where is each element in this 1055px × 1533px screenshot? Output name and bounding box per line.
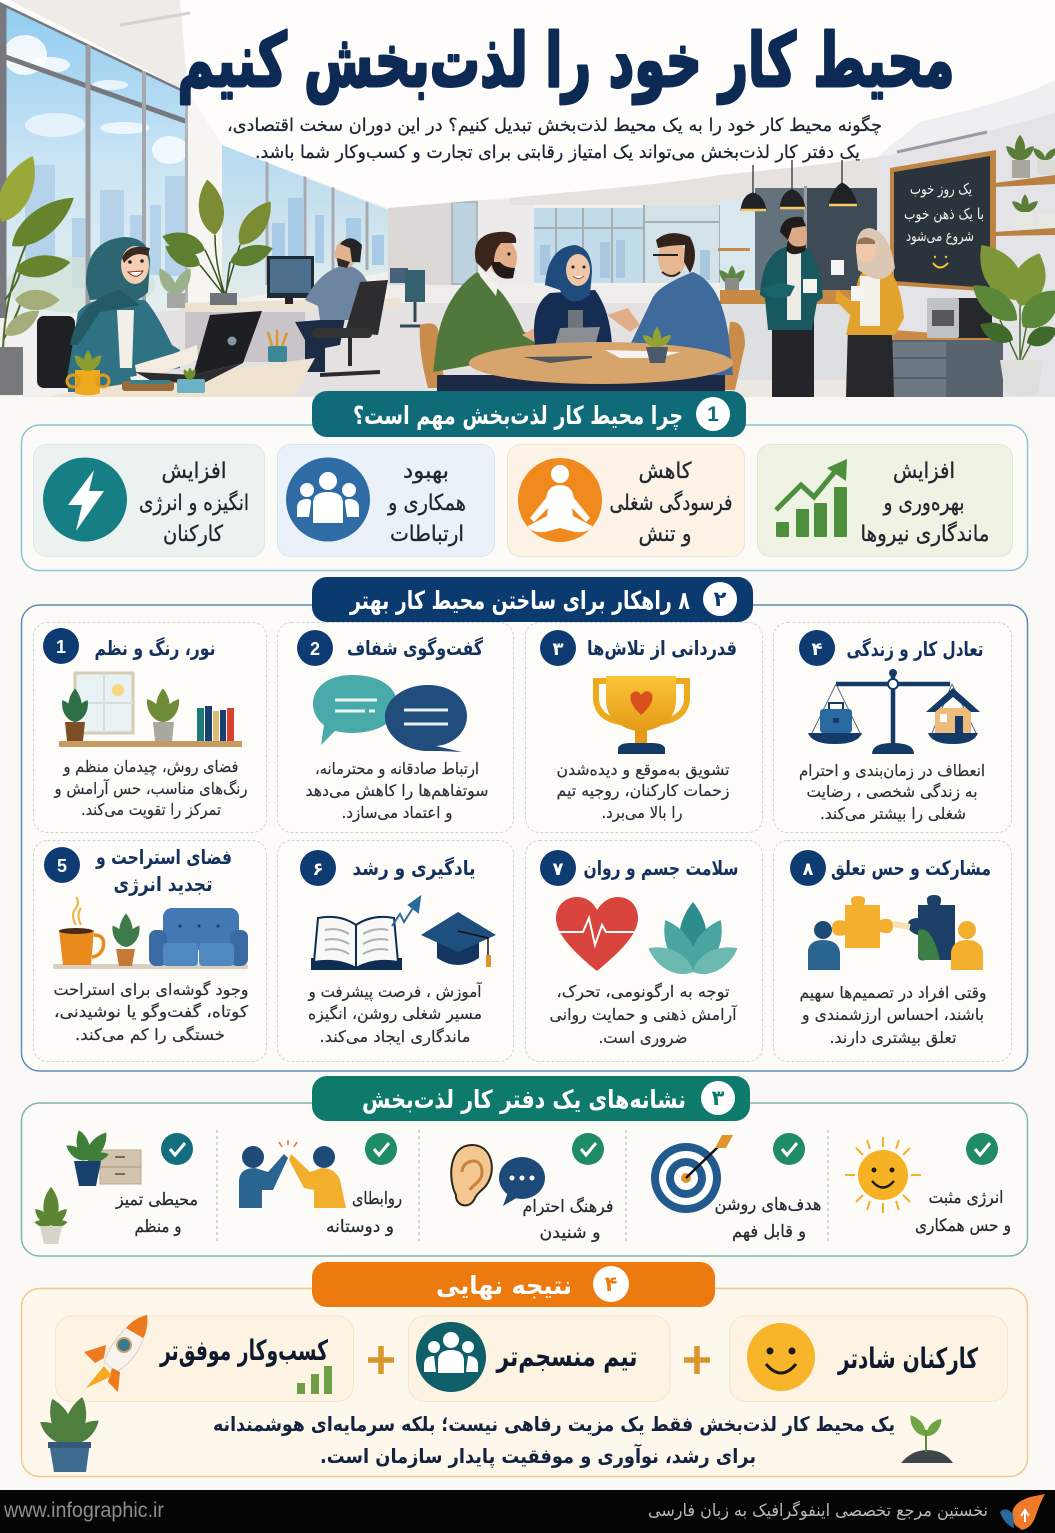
sign: clear goals: و قابل فهم (732, 1222, 806, 1242)
card 2: open conversation: ارتباط صادقانه و محترمانه، (315, 759, 479, 779)
white curved ceiling (0, 0, 1055, 208)
second window band (222, 145, 388, 302)
back desk and monitor (180, 256, 430, 362)
card 8: participation: مشارکت و حس تعلق (831, 856, 991, 880)
card 5: rest corner: تجدید انرژی (114, 872, 212, 896)
pendant lamps (741, 160, 857, 210)
card 1: light colour order: تمرکز را تقویت می‌کند. (81, 800, 221, 820)
card 5: rest corner: 5 (57, 856, 67, 876)
card 7: mental and physical health: سلامت جسم و روان (584, 856, 738, 880)
plant on shelf (716, 248, 750, 290)
panel: eight solutions (22, 605, 1028, 1071)
icon: balance scale (808, 669, 980, 754)
card 4: work life balance (774, 622, 1012, 832)
panel: signs of a pleasant office (22, 1103, 1028, 1256)
icon: sprout (901, 1412, 953, 1463)
back window right and dark cabinet (720, 186, 877, 397)
card 4: work life balance: شغلی را بیشتر می‌کند. (820, 804, 966, 824)
heading pill 1: 1 (707, 403, 719, 426)
desk with laptop (43, 311, 315, 397)
woman in navy (534, 245, 612, 345)
track light (897, 132, 987, 152)
icon: ear (451, 1145, 492, 1205)
closing statement (213, 1412, 895, 1469)
intro text (227, 114, 882, 163)
icon: target (651, 1135, 733, 1213)
icon: potted plant (36, 1395, 103, 1472)
footer bar (0, 1490, 1055, 1533)
icon: graduation cap (421, 912, 496, 967)
ceiling beige band (510, 157, 877, 205)
card 1: light colour order: 1 (56, 637, 66, 657)
chalkboard with quote: یک روز خوب (910, 180, 972, 198)
footer bar: www.infographic.ir (3, 1499, 164, 1522)
heading pill 2 (312, 577, 753, 622)
card 7: mental and physical health: ۷ (552, 859, 564, 879)
card 2: open conversation: گفت‌وگوی شفاف (347, 636, 483, 660)
section 2 (22, 577, 1028, 1071)
icon: lotus (644, 902, 742, 981)
card: productivity (758, 444, 1012, 556)
chalkboard with quote: با یک ذهن خوب (904, 205, 984, 223)
card: burnout: کاهش (638, 459, 692, 484)
heading pill 1 (312, 391, 746, 437)
card 3: appreciation: را بالا می‌برد. (602, 803, 682, 823)
sign: tidy environment: محیطی تمیز (115, 1190, 198, 1210)
card: motivation: کارکنان (163, 522, 223, 547)
result: more successful business: کسب‌وکار موفق‌تر (159, 1334, 328, 1367)
icon: logo (1000, 1494, 1045, 1530)
sign: tidy environment (32, 1129, 198, 1244)
left window wall (0, 0, 188, 318)
heading pill 2: ۸ راهکار برای ساختن محیط کار بهتر (348, 586, 690, 616)
card 5: rest corner: خستگی را کم می‌کند. (75, 1025, 225, 1045)
card: burnout: فرسودگی شغلی (610, 490, 732, 516)
icon: puzzle and people (808, 895, 983, 970)
icon: mug plant sofa (53, 897, 248, 969)
plant: middle (159, 180, 272, 308)
sign: positive energy (845, 1133, 1011, 1236)
top left soffit (10, 0, 188, 92)
card 4: work life balance: تعادل کار و زندگی (846, 637, 984, 661)
section 4 (22, 1262, 1028, 1476)
card 6: learning: ۶ (312, 859, 324, 879)
card 1: light colour order: نور، رنگ و نظم (94, 636, 216, 660)
heading pill 4: ۴ (605, 1273, 618, 1296)
card: teamwork: همکاری و (387, 491, 466, 516)
standing woman with cup (831, 228, 904, 397)
wall shelves with plants (995, 135, 1055, 236)
card 4: work life balance: به زندگی شخصی ، رضایت (806, 782, 978, 802)
card 6: learning (278, 840, 514, 1062)
back worker (295, 238, 388, 375)
card 3: appreciation: قدردانی از تلاش‌ها (587, 636, 737, 660)
card: motivation: افزایش (162, 459, 226, 484)
card 3: appreciation: ۳ (552, 639, 564, 659)
icon: lightning bolt (43, 458, 127, 542)
card: teamwork: ارتباطات (390, 522, 464, 547)
card 6: learning: یادگیری و رشد (352, 856, 476, 880)
icon: high five (239, 1140, 346, 1208)
sign: friendly relations (239, 1133, 402, 1237)
heading pill 4 (312, 1262, 715, 1307)
icon: meditation (518, 458, 602, 542)
result: cohesive team (408, 1316, 670, 1402)
sign: positive energy: انرژی مثبت (928, 1188, 1004, 1208)
card 5: rest corner: وجود گوشه‌ای برای استراحت (54, 980, 248, 1000)
card 7: mental and physical health (526, 840, 762, 1062)
card 5: rest corner: کوتاه، گفت‌وگو یا نوشیدنی، (54, 1002, 248, 1022)
panel: why it matters (22, 425, 1028, 570)
counter with coffee machine and drawers (890, 298, 1003, 397)
sign: listening culture: فرهنگ احترام (522, 1196, 614, 1217)
card 2: open conversation: سوتفاهم‌ها را کاهش می‌دهد (306, 781, 488, 801)
icon: small potted plant (32, 1187, 70, 1244)
card 5: rest corner (34, 840, 266, 1062)
sign: friendly relations: و دوستانه (326, 1217, 394, 1237)
result: happier staff: کارکنان شادتر (837, 1342, 979, 1375)
card: burnout: و تنش (638, 522, 692, 547)
card: teamwork: بهبود (403, 459, 449, 484)
card 6: learning: ماندگاری ایجاد می‌کند. (320, 1027, 470, 1047)
icon: growth arrow (392, 897, 420, 926)
card 3: appreciation: تشویق به‌موقع و دیده‌شدن (556, 760, 730, 780)
chairs (420, 322, 745, 390)
card 4: work life balance: انعطاف در زمان‌بندی و احترام (799, 761, 985, 781)
card 8: participation: تعلق بیشتری دارند. (830, 1028, 956, 1048)
floor (154, 303, 727, 397)
meeting group at round table (420, 232, 745, 397)
section 1 (22, 391, 1028, 570)
icon: speech bubbles (313, 675, 467, 752)
icon: people (286, 458, 370, 542)
card 2: open conversation: و اعتماد می‌سازد. (342, 803, 452, 823)
card 8: participation: وقتی افراد در تصمیم‌ها سهیم (800, 983, 986, 1003)
sign: friendly relations: روابطای (352, 1189, 402, 1209)
card 1: light colour order: رنگ‌های مناسب، حس آرامش و (54, 779, 247, 799)
chalkboard with quote (890, 150, 996, 292)
icon: growth chart (776, 459, 847, 537)
card: burnout (508, 444, 744, 556)
card 3: appreciation: زحمات کارکنان، روجیه تیم (556, 781, 730, 801)
plant: right with pot (972, 245, 1055, 396)
card 8: participation: ۸ (802, 859, 814, 879)
table (437, 375, 725, 391)
icon: rocket (84, 1315, 147, 1392)
card 2: open conversation (278, 622, 514, 832)
heading pill 4: نتیجه نهایی (436, 1271, 572, 1301)
card: motivation (34, 444, 264, 556)
card 7: mental and physical health: ضروری است. (598, 1028, 688, 1048)
intro text: یک دفتر کار لذت‌بخش می‌تواند یک امتیاز رقابتی برای تجارت و کسب‌وکار شما باشد. (255, 142, 860, 163)
card 8: participation: باشند، احساس ارزشمندی و (801, 1005, 984, 1025)
result: cohesive team: تیم منسجم‌تر (495, 1340, 638, 1373)
woman at laptop (37, 237, 198, 392)
footer bar: نخستین مرجع تخصصی اینفوگرافیک به زبان فارسی (648, 1500, 988, 1521)
icon: window shelf plants books (58, 673, 242, 747)
icon: heart with pulse (556, 897, 638, 971)
card 4: work life balance: ۴ (812, 639, 822, 659)
result: more successful business (56, 1315, 354, 1402)
card 8: participation (774, 840, 1012, 1062)
result: happier staff (730, 1316, 1008, 1402)
sign: clear goals: هدف‌های روشن (714, 1195, 822, 1215)
card: productivity: افزایش (893, 459, 955, 484)
icon: trophy (596, 676, 687, 754)
man in blue (607, 233, 733, 375)
standing man with cup (760, 217, 823, 397)
card 2: open conversation: 2 (310, 639, 320, 659)
section 3 (22, 1076, 1028, 1256)
back wall (388, 200, 478, 285)
heading pill 3: نشانه‌های یک دفتر کار لذت‌بخش (362, 1085, 686, 1115)
card 3: appreciation (526, 622, 762, 832)
panel: final result (22, 1288, 1028, 1476)
card: motivation: انگیزه و انرژی (139, 490, 249, 516)
card 6: learning: آموزش ، فرصت پیشرفت و (308, 982, 483, 1002)
card 5: rest corner: فضای استراحت و (95, 845, 232, 869)
sign: tidy environment: و منظم (134, 1217, 182, 1237)
icon: speech bubble (499, 1157, 545, 1206)
hero office illustration (0, 0, 1055, 397)
sign: listening culture: و شنیدن (540, 1223, 600, 1243)
card 1: light colour order: فضای روش، چیدمان منظم و (63, 757, 239, 777)
heading pill 1: چرا محیط کار لذت‌بخش مهم است؟ (353, 401, 683, 431)
white column (188, 106, 189, 303)
heading pill 2: ۲ (714, 588, 727, 611)
intro text: چگونه محیط کار خود را به یک محیط لذت‌بخش تبدیل کنیم؟ در این دوران سخت اقتصادی، (227, 114, 882, 136)
closing statement: برای رشد، نوآوری و موفقیت پایدار سازمان است. (320, 1443, 756, 1469)
plus sign (684, 1346, 710, 1374)
sign: positive energy: و حس همکاری (915, 1216, 1011, 1236)
card 7: mental and physical health: آرامش ذهنی و حمایت روانی (550, 1005, 738, 1025)
closing statement: یک محیط کار لذت‌بخش فقط یک مزیت رفاهی نیست؛ بلکه سرمایه‌ای هوشمندانه (213, 1412, 895, 1436)
man in green (433, 232, 535, 372)
sign: clear goals (651, 1133, 822, 1242)
icon: sun (845, 1137, 921, 1213)
card 1: light colour order (34, 622, 266, 832)
chalkboard with quote: شروع می‌شود (906, 227, 974, 245)
icon: cabinet and plant (63, 1129, 141, 1186)
lavender right wall (877, 113, 1055, 397)
icon: open book (311, 917, 402, 970)
heading pill 3 (312, 1076, 750, 1121)
sign: listening culture (451, 1133, 614, 1243)
card 7: mental and physical health: توجه به ارگونومی، تحرک، (556, 982, 730, 1002)
card: productivity: بهره‌وری و (883, 491, 964, 516)
plus sign (368, 1346, 394, 1374)
card 6: learning: مسیر شغلی روشن، انگیزه (308, 1004, 482, 1024)
card: teamwork (278, 444, 494, 556)
plant: left (0, 156, 74, 395)
heading pill 3: ۳ (712, 1087, 725, 1110)
laptop (556, 327, 600, 344)
card: productivity: ماندگاری نیروها (860, 521, 990, 547)
